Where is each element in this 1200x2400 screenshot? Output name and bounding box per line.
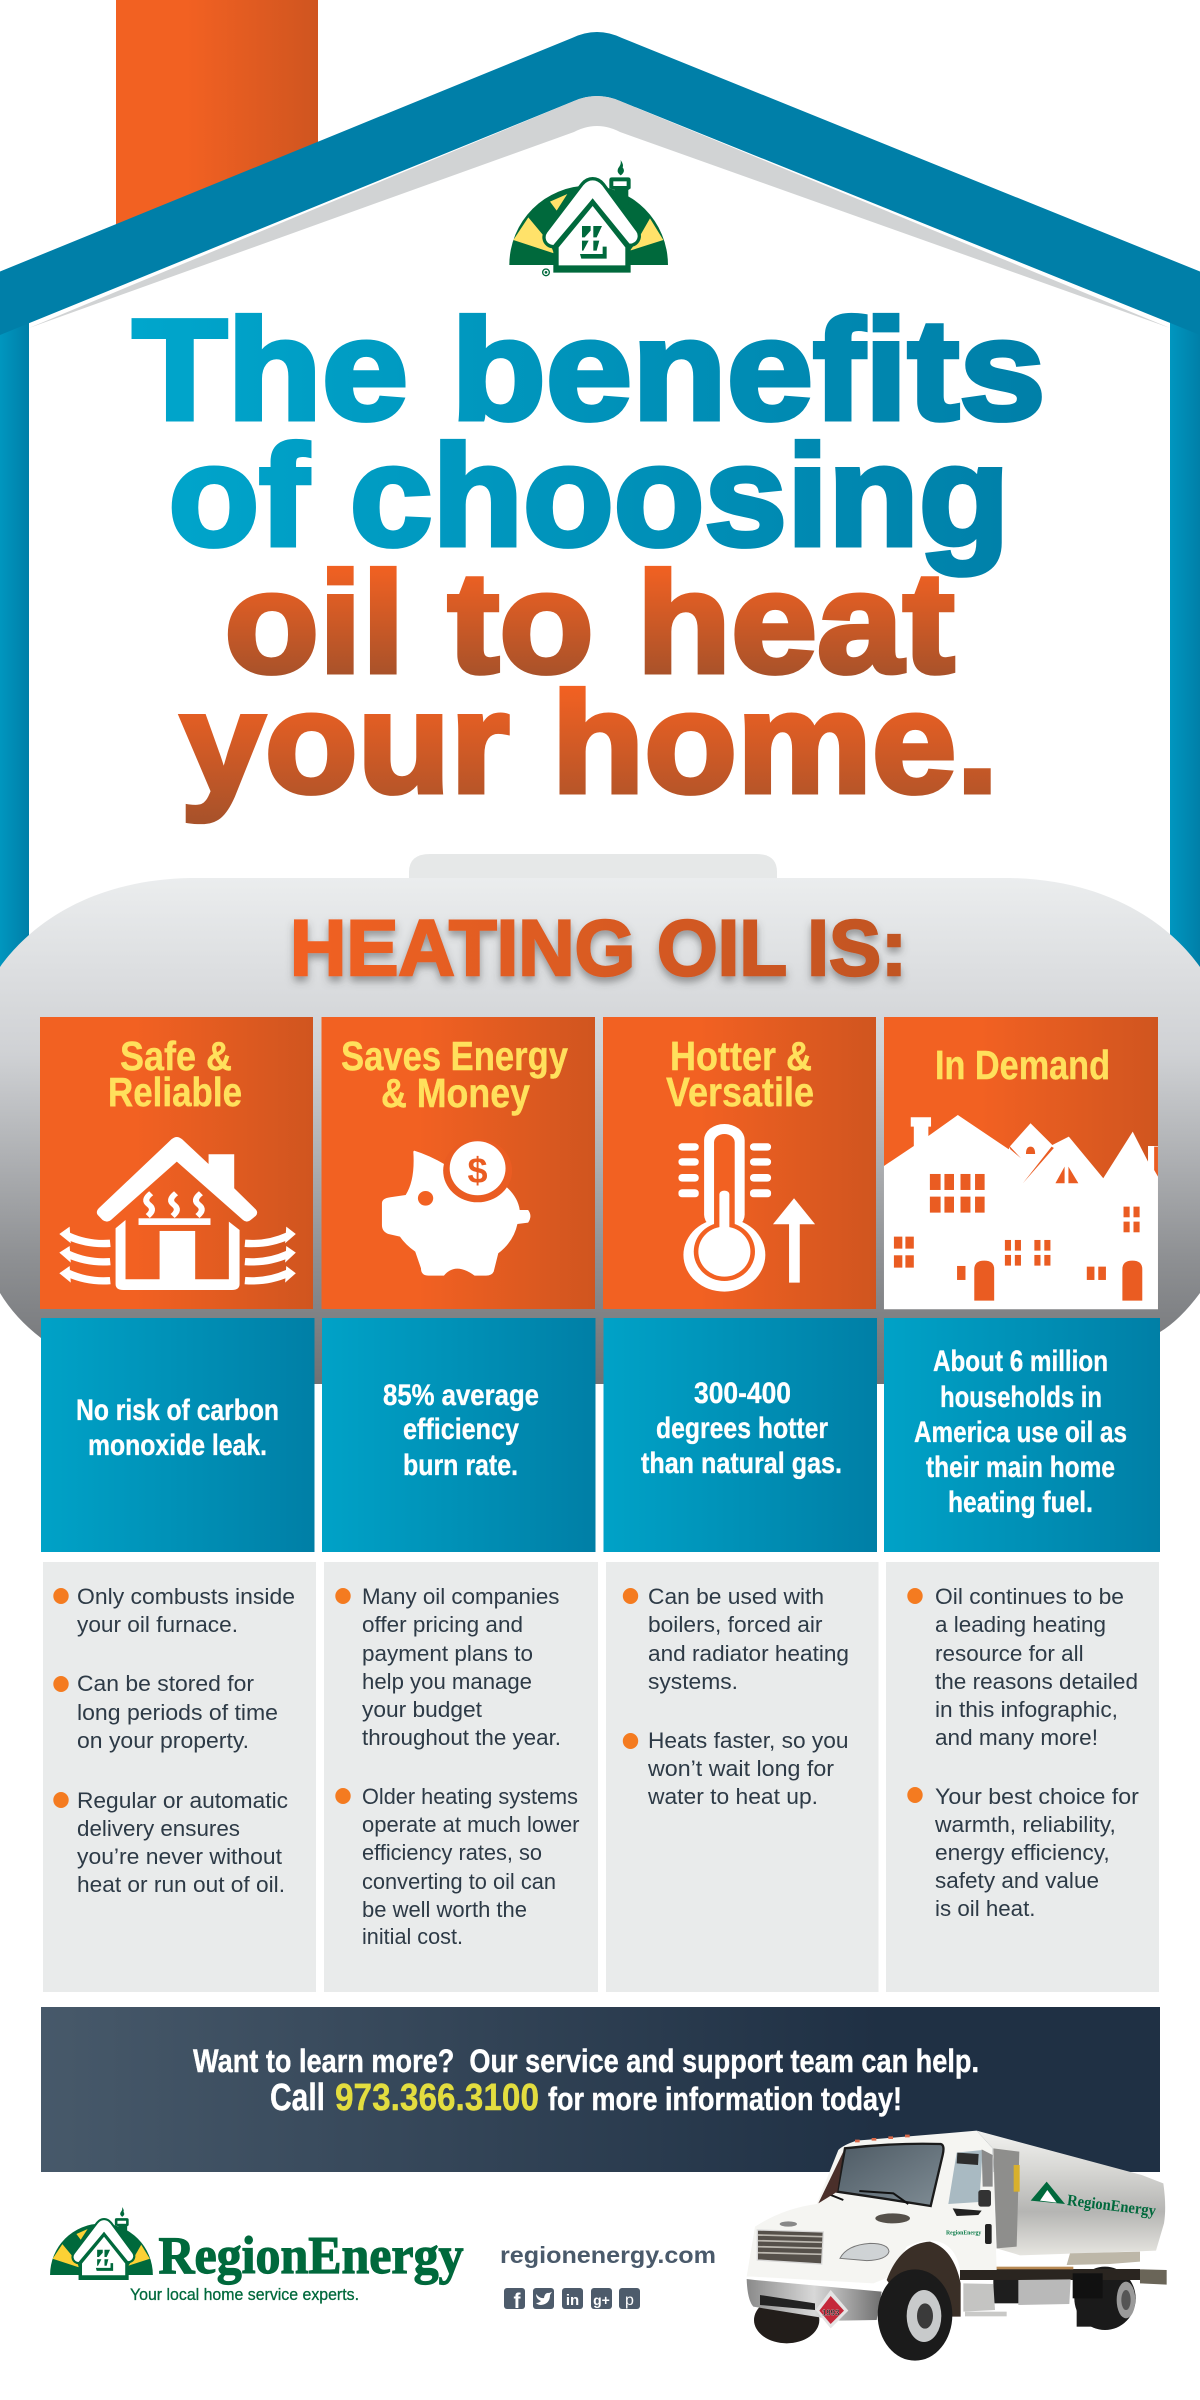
list panel: saves energy: payment plans to	[362, 1641, 533, 1666]
far front wheel	[754, 2297, 819, 2343]
hazmat placard: 1993	[822, 2307, 839, 2317]
panel: saves energy and money	[322, 1017, 595, 1309]
logo: region energy wordmark	[50, 2207, 463, 2304]
heading: heating oil is: HEATING OIL IS:	[290, 903, 907, 992]
title: The benefits	[132, 291, 1046, 450]
list panel: hotter: won’t wait long for	[647, 1756, 834, 1781]
social icons: p	[625, 2292, 634, 2309]
truck illustration	[747, 2131, 1167, 2361]
list panel: in demand: in this infographic,	[935, 1697, 1118, 1722]
panel: hotter and versatile	[603, 1017, 876, 1309]
list panel: in demand: and many more!	[935, 1725, 1098, 1750]
call to action banner: 973.366.3100	[335, 2077, 539, 2119]
title: oil to heat	[224, 544, 954, 703]
list panel: in demand: resource for all	[935, 1641, 1084, 1666]
call to action banner: Call	[270, 2077, 325, 2119]
icon: piggy bank: $	[467, 1150, 488, 1191]
stat: no carbon monoxide: No risk of carbon	[76, 1394, 279, 1427]
list panel: safe and reliable: long periods of time	[77, 1700, 278, 1725]
stat: efficiency: 85% average	[383, 1379, 539, 1412]
logo: region energy house	[509, 160, 668, 276]
icon: thermometer with up arrow	[678, 1124, 815, 1292]
list panel: saves energy: operate at much lower	[362, 1812, 580, 1837]
list panel: saves energy: efficiency rates, so	[362, 1840, 542, 1865]
list panel: saves energy: Many oil companies	[362, 1584, 560, 1609]
stat: households: heating fuel.	[948, 1486, 1093, 1519]
list panel: in demand: a leading heating	[935, 1612, 1106, 1637]
card title: Saves Energy	[341, 1033, 568, 1079]
roof lights	[855, 2135, 910, 2142]
bumper	[747, 2279, 882, 2321]
side windows	[818, 2149, 993, 2216]
stat: households	[884, 1318, 1160, 1552]
front wheel	[878, 2269, 952, 2361]
title: of choosing	[168, 417, 1010, 576]
icon: house radiating heat	[59, 1137, 296, 1290]
card title: Hotter &	[670, 1033, 812, 1079]
title: your home.	[180, 664, 998, 823]
list panel: hotter: Can be used with	[648, 1584, 824, 1609]
stat: hotter than gas: 300-400	[694, 1377, 791, 1410]
list panel: hotter: and radiator heating	[648, 1641, 849, 1666]
list panel: saves energy: your budget	[362, 1697, 482, 1722]
list panel: hotter: water to heat up.	[647, 1784, 818, 1809]
list panel: hotter	[606, 1562, 878, 1992]
list panel: saves energy: Older heating systems	[362, 1784, 578, 1809]
list panel: safe and reliable: your oil furnace.	[77, 1612, 238, 1637]
stat: households: About 6 million	[933, 1345, 1108, 1378]
list panel: safe and reliable: Regular or automatic	[77, 1788, 288, 1813]
social icons	[504, 2288, 640, 2313]
stat: efficiency: efficiency	[403, 1413, 519, 1446]
card title: Safe &	[120, 1033, 232, 1079]
list panel: in demand: is oil heat.	[935, 1896, 1036, 1921]
panel: safe and reliable	[40, 1017, 313, 1309]
call to action banner	[41, 2007, 1160, 2172]
list panel: safe and reliable: Only combusts inside	[77, 1584, 295, 1609]
list panel: saves energy: help you manage	[362, 1669, 532, 1694]
oil tank	[0, 854, 1200, 1384]
icon: piggy bank	[382, 1139, 530, 1276]
stat: households: households in	[940, 1381, 1102, 1414]
list panel: hotter: systems.	[648, 1669, 738, 1694]
logo: region energy wordmark: Your local home service experts.	[130, 2285, 359, 2304]
stat: no carbon monoxide	[41, 1318, 314, 1552]
list panel: in demand: warmth, reliability,	[934, 1812, 1116, 1837]
stat: hotter than gas	[604, 1318, 877, 1552]
card title: In Demand	[935, 1042, 1110, 1088]
logo mark	[50, 2207, 153, 2280]
list panel: safe and reliable: delivery ensures	[77, 1816, 240, 1841]
stat: hotter than gas: than natural gas.	[641, 1447, 842, 1480]
stat: households: America use oil as	[914, 1416, 1127, 1449]
list panel: in demand: the reasons detailed	[935, 1669, 1138, 1694]
list panel: safe and reliable: on your property.	[77, 1728, 249, 1753]
panel: in demand	[884, 1017, 1158, 1309]
list panel: hotter: Heats faster, so you	[648, 1728, 848, 1753]
social icons: f	[514, 2290, 522, 2313]
card title	[341, 1033, 568, 1116]
website address: regionenergy.com	[500, 2242, 716, 2268]
hood vent	[875, 2213, 910, 2223]
stat: hotter than gas: degrees hotter	[656, 1412, 828, 1445]
stat: households: their main home	[926, 1451, 1115, 1484]
door text: RegionEnergy	[946, 2230, 982, 2237]
list panel: in demand: safety and value	[935, 1868, 1099, 1893]
list panel: saves energy: offer pricing and	[362, 1612, 523, 1637]
card title: Versatile	[666, 1069, 814, 1115]
tank body: RegionEnergy	[1066, 2192, 1157, 2220]
social icons: in	[566, 2292, 579, 2309]
call to action banner: for more information today!	[548, 2081, 902, 2117]
headlight	[840, 2243, 889, 2261]
windshield	[837, 2144, 943, 2206]
stat: efficiency: burn rate.	[403, 1449, 518, 1482]
card title	[666, 1033, 814, 1115]
list panel: safe and reliable: Can be stored for	[77, 1671, 254, 1696]
list panel: saves energy: converting to oil can	[362, 1869, 556, 1894]
list panel: in demand	[886, 1562, 1159, 1992]
hazmat placard	[816, 2290, 848, 2328]
chassis and rear parts	[960, 2267, 1167, 2316]
card title	[108, 1033, 242, 1115]
list panel: saves energy	[324, 1562, 598, 1992]
list panel: saves energy: throughout the year.	[362, 1725, 561, 1750]
cab	[747, 2131, 997, 2283]
list panel: saves energy: initial cost.	[362, 1924, 463, 1949]
list panel: safe and reliable: you’re never without	[77, 1844, 282, 1869]
rear wheel	[1074, 2267, 1136, 2330]
list panel: saves energy: be well worth the	[362, 1897, 527, 1922]
house walls	[0, 320, 1200, 1040]
icon: row of houses	[884, 1115, 1158, 1309]
grille	[757, 2221, 823, 2264]
roof	[0, 32, 1200, 335]
wheel arch	[887, 2242, 961, 2317]
stat: no carbon monoxide: monoxide leak.	[88, 1429, 267, 1462]
list panel: in demand: Your best choice for	[935, 1784, 1139, 1809]
card title: & Money	[381, 1070, 530, 1116]
tank body	[977, 2131, 1165, 2265]
logo: region energy wordmark: RegionEnergy	[158, 2227, 464, 2285]
list panel: safe and reliable: heat or run out of oil.	[77, 1872, 285, 1897]
call to action banner: Want to learn more? Our service and support team can help.	[193, 2043, 979, 2079]
card title: Reliable	[108, 1069, 242, 1115]
chimney	[116, 0, 318, 245]
title	[132, 291, 1046, 823]
list panel: in demand: energy efficiency,	[935, 1840, 1110, 1865]
stat: efficiency	[322, 1318, 596, 1552]
list panel: in demand: Oil continues to be	[935, 1584, 1124, 1609]
social icons: g+	[593, 2292, 610, 2308]
list panel: safe and reliable	[43, 1562, 316, 1992]
list panel: hotter: boilers, forced air	[648, 1612, 822, 1637]
